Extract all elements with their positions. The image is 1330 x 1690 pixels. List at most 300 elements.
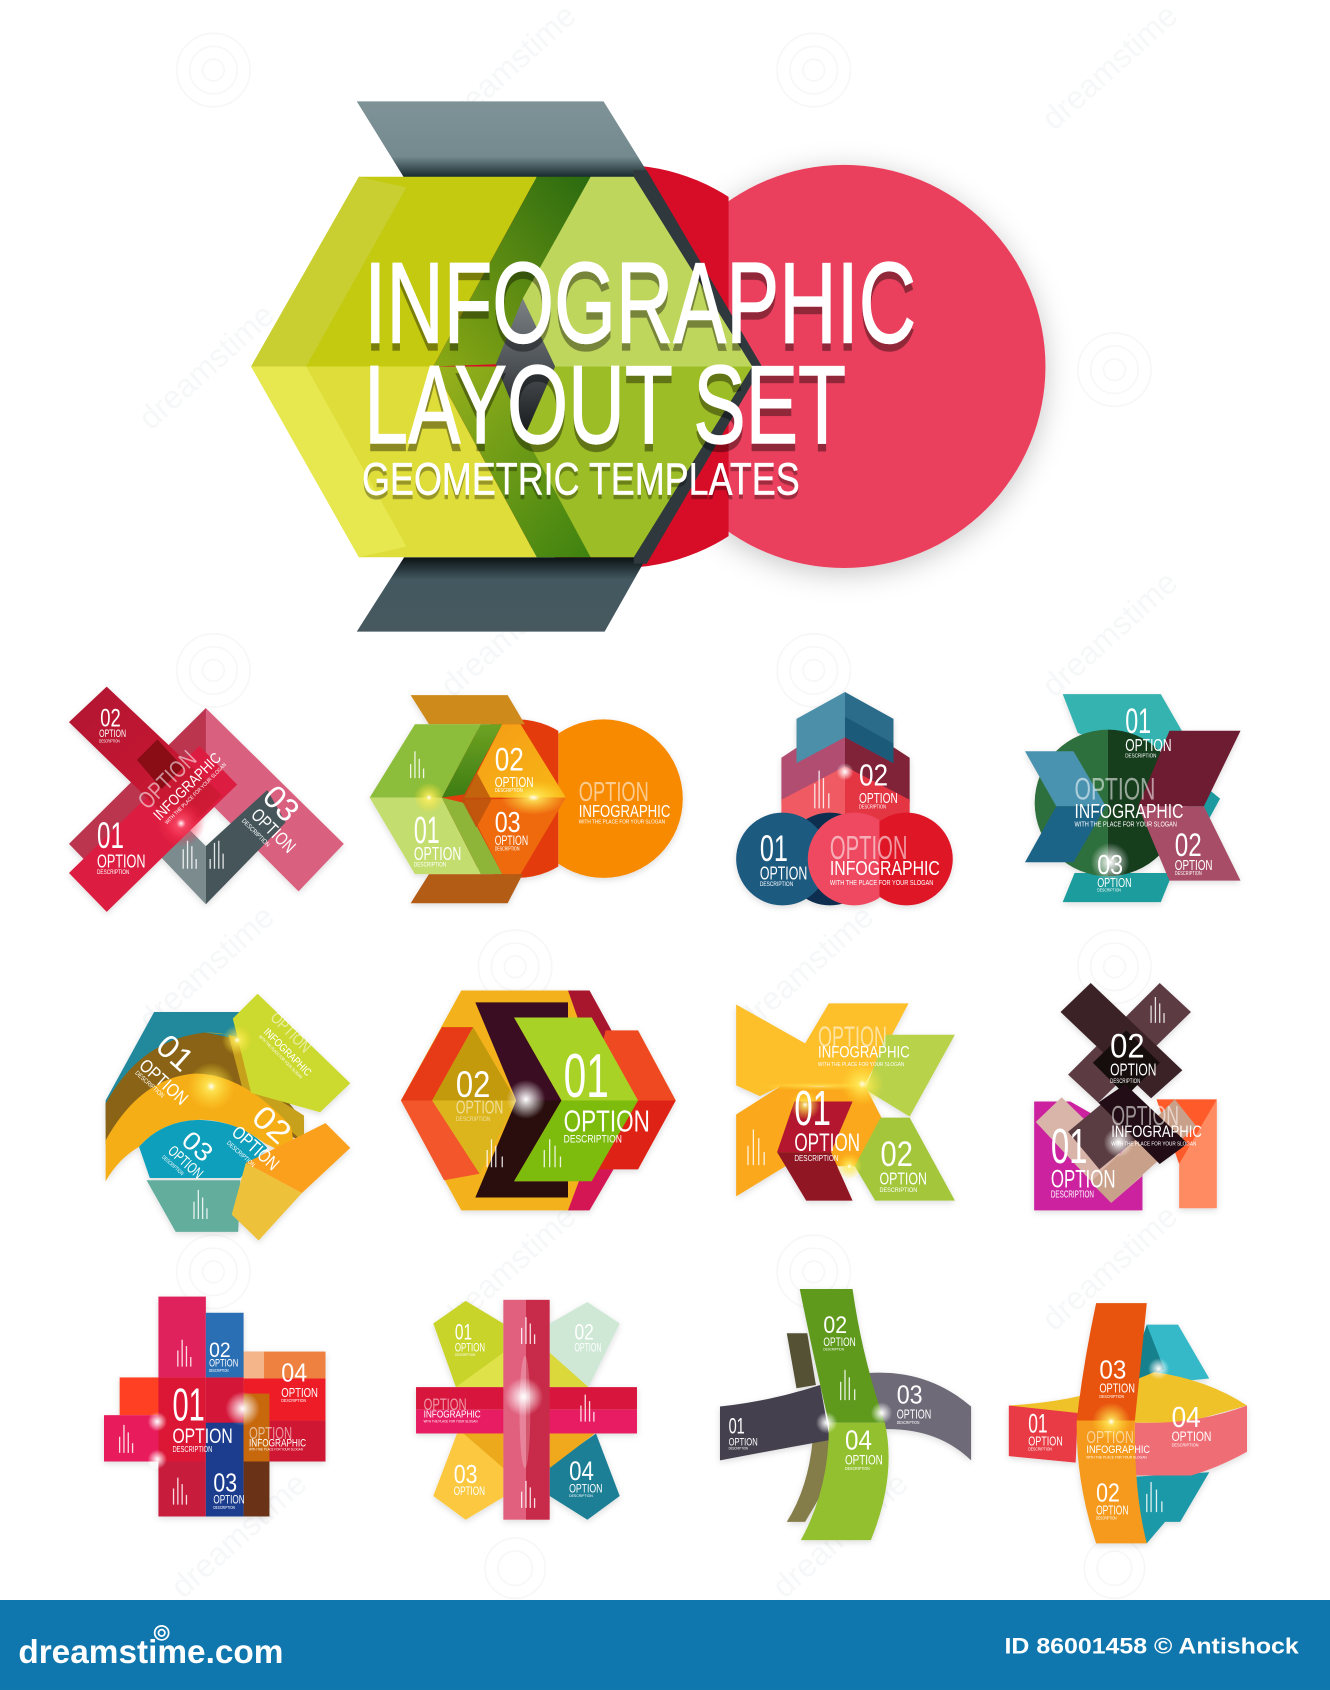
labels: 02 (859, 760, 888, 793)
labels: OPTION (579, 776, 649, 807)
glow (504, 1377, 543, 1416)
labels (729, 1313, 931, 1471)
labels: DESCRIPTION (564, 1133, 622, 1145)
glow (507, 1080, 545, 1119)
band bottom (442, 798, 502, 874)
watermark pattern: dreamstime (731, 898, 880, 1038)
labels: DESCRIPTION (133, 1070, 166, 1100)
green bottom (525, 366, 752, 557)
glow (519, 1356, 530, 1468)
labels (1075, 701, 1213, 892)
blue bottom (1025, 806, 1106, 862)
glow (1104, 1127, 1134, 1158)
watermark pattern: dreamstime (131, 297, 281, 436)
labels: 02 (245, 1098, 298, 1151)
labels: 02 (100, 705, 121, 732)
layout 2: orange circle (370, 695, 683, 903)
layout 6: hexagon chevrons (401, 991, 676, 1210)
watermark pattern: dreamstime (433, 1198, 583, 1337)
labels: OPTION (1172, 1428, 1211, 1444)
labels: OPTION (495, 832, 528, 848)
labels (760, 760, 940, 888)
labels: 02 (1175, 827, 1202, 863)
centre bottom right (550, 1433, 595, 1468)
title: LAYOUT SET (364, 343, 846, 467)
green ribbon top (800, 1289, 885, 1423)
labels: INFOGRAPHIC (818, 1043, 910, 1061)
labels: INFOGRAPHIC (150, 750, 225, 824)
labels: 01 (149, 1027, 201, 1078)
coral lower right (1135, 1405, 1247, 1476)
layout 9: colour columns (104, 1297, 325, 1516)
green circle right (1108, 730, 1181, 876)
green top (370, 724, 481, 798)
green circle left (1035, 730, 1108, 876)
labels: DESCRIPTION (99, 739, 120, 744)
blue circle (736, 813, 829, 905)
labels: WITH THE PLACE FOR YOUR SLOGAN (249, 1448, 303, 1452)
bars (544, 1139, 560, 1167)
pink left block (104, 1415, 159, 1461)
top left band (1061, 983, 1182, 1098)
labels: DESCRIPTION (495, 788, 523, 794)
horizontal upper (416, 1387, 637, 1410)
labels: OPTION (135, 1054, 193, 1109)
labels: 03 (495, 807, 521, 839)
labels: DESCRIPTION (1097, 887, 1121, 892)
hexagon outer lighter bottom (251, 366, 406, 557)
brown arc (106, 1033, 304, 1145)
bottom grey band (357, 557, 647, 632)
orange left block (120, 1377, 160, 1415)
band top (442, 724, 502, 798)
labels: DESCRIPTION (1172, 1442, 1199, 1447)
bottom hexagon (147, 1180, 240, 1232)
labels (456, 1041, 650, 1145)
centre top right (550, 1353, 588, 1387)
labels: DESCRIPTION (160, 1155, 184, 1177)
yellow panel (232, 1163, 302, 1241)
layout 7: yellow and green arrows (736, 1003, 955, 1201)
bars (411, 751, 424, 778)
labels (794, 1022, 927, 1194)
orange block bottom (1179, 1099, 1217, 1208)
red horizontal upper (244, 1379, 325, 1421)
red column centre (158, 1377, 206, 1461)
labels: INFOGRAPHIC (579, 801, 670, 821)
dark grey ribbon (720, 1385, 830, 1460)
left red band bottom (401, 1100, 480, 1180)
dark square (137, 739, 183, 789)
yellow green panel (233, 994, 350, 1112)
blue column middle (206, 1377, 244, 1444)
labels (1051, 1027, 1202, 1200)
lower red band (69, 746, 237, 912)
labels: 01 (1125, 701, 1151, 741)
layout 11: green ribbon (720, 1289, 971, 1540)
labels: OPTION (456, 1096, 503, 1117)
red circle (434, 166, 729, 567)
centre top left (456, 1353, 503, 1387)
bars (581, 1395, 594, 1422)
labels (1028, 1357, 1211, 1521)
glow (222, 1025, 252, 1055)
labels: OPTION (569, 1482, 602, 1496)
dark red chevron bottom (777, 1152, 853, 1201)
labels: 01 (97, 815, 124, 856)
labels: DESCRIPTION (455, 1353, 476, 1357)
labels: 01 (172, 1379, 205, 1431)
labels: OPTION (213, 1493, 245, 1507)
watermark pattern (131, 0, 1184, 1605)
light orange strip (244, 1352, 264, 1379)
labels: OPTION (760, 862, 807, 883)
gold diamond top (432, 1027, 516, 1100)
blue top (1025, 751, 1106, 806)
top band (411, 695, 525, 724)
dark red chevron top (777, 1102, 853, 1152)
labels: 03 (454, 1461, 477, 1489)
glow (148, 1450, 167, 1469)
labels: DESCRIPTION (1028, 1447, 1052, 1452)
labels: OPTION (879, 1169, 927, 1189)
labels: WITH THE PLACE FOR YOUR SLOGAN (579, 819, 665, 825)
centre diamond (496, 299, 555, 435)
labels: INFOGRAPHIC (1086, 1444, 1150, 1456)
layout 10: cross and petals (416, 1300, 637, 1520)
labels: 02 (1110, 1027, 1145, 1065)
orange strip (244, 1352, 325, 1379)
title: GEOMETRIC TEMPLATES (362, 454, 800, 505)
bottom band (411, 874, 523, 903)
glow (754, 1082, 884, 1091)
glow (790, 1090, 820, 1120)
green top (865, 1035, 955, 1117)
title (362, 240, 916, 505)
teal top shape (1142, 1325, 1209, 1385)
layout 4: teal and green (1025, 694, 1241, 902)
labels: DESCRIPTION (569, 1494, 593, 1498)
watermark pattern: dreamstime (131, 898, 281, 1038)
labels: 01 (564, 1041, 609, 1111)
lower red chevron (781, 766, 845, 835)
teal back shape (106, 1012, 259, 1121)
top chevron dark fold (845, 717, 893, 763)
brown arc right (205, 1033, 304, 1142)
petal top left (433, 1301, 503, 1387)
labels: 04 (569, 1456, 594, 1486)
dark chevron bottom (475, 1100, 568, 1197)
top chevron left (796, 692, 845, 763)
labels: 02 (823, 1313, 847, 1339)
watermark pattern: dreamstime (1035, 1198, 1184, 1337)
labels: OPTION (729, 1436, 758, 1448)
labels: WITH THE PLACE FOR YOUR SLOGAN (1075, 822, 1177, 829)
labels: 03 (176, 1126, 218, 1168)
brown column bottom (244, 1461, 269, 1516)
petal bottom left (433, 1433, 503, 1520)
labels (424, 1320, 602, 1498)
orange circle (558, 719, 685, 882)
labels: WITH THE PLACE FOR YOUR SLOGAN (258, 1034, 303, 1079)
labels: DESCRIPTION (240, 818, 271, 849)
labels: INFOGRAPHIC (1111, 1123, 1202, 1141)
bars (522, 1481, 535, 1508)
labels: OPTION (247, 804, 300, 857)
plum chevron right (845, 716, 910, 803)
labels: OPTION (134, 746, 202, 815)
pink circle (808, 813, 879, 905)
red left (1009, 1405, 1078, 1463)
right red top (587, 1030, 676, 1100)
grey ribbon (868, 1373, 971, 1460)
bars (748, 1130, 764, 1165)
labels: 04 (281, 1360, 307, 1388)
orange middle (736, 1086, 889, 1196)
green chevron top (514, 1017, 638, 1100)
watermark pattern: dreamstime (164, 1465, 313, 1605)
vertical left (503, 1300, 526, 1520)
crimson top (568, 991, 620, 1045)
labels: DESCRIPTION (1175, 871, 1202, 877)
labels: DESCRIPTION (729, 1447, 748, 1451)
labels: 02 (495, 742, 524, 778)
labels: OPTION (454, 1484, 485, 1498)
teal arc (139, 1120, 267, 1178)
orange panel (246, 1123, 350, 1193)
labels: WITH THE PLACE FOR YOUR SLOGAN (818, 1062, 904, 1068)
bars (1147, 1482, 1162, 1512)
plum top (1138, 731, 1241, 806)
labels: DESCRIPTION (879, 1187, 917, 1194)
hexagon left bottom (251, 366, 537, 557)
hexagon outer lighter top (251, 177, 406, 366)
labels: OPTION (164, 1143, 206, 1183)
labels: OPTION (249, 1423, 292, 1443)
hero infographic (251, 101, 1045, 632)
bars (174, 1478, 186, 1505)
horizontal lower (416, 1410, 637, 1433)
centre black diamond (1093, 1030, 1160, 1096)
bottom teal band (1063, 873, 1173, 902)
labels: DESCRIPTION (209, 1368, 228, 1373)
labels: OPTION (1028, 1433, 1063, 1448)
labels: INFOGRAPHIC (261, 1026, 314, 1079)
red circle (438, 720, 560, 882)
top teal band (1063, 694, 1186, 760)
labels: OPTION (424, 1396, 467, 1414)
labels: DESCRIPTION (97, 869, 130, 876)
labels: OPTION (823, 1335, 856, 1349)
blue column top (206, 1313, 244, 1377)
labels: OPTION (209, 1358, 238, 1370)
labels: INFOGRAPHIC (1075, 800, 1183, 823)
lower left diamond (1068, 1084, 1159, 1169)
bars (487, 1139, 502, 1167)
labels: OPTION (99, 728, 126, 740)
left pink band (69, 708, 206, 884)
tan band right (1091, 1099, 1196, 1203)
layout 3: circles and chevrons (736, 692, 953, 905)
labels (172, 1337, 318, 1510)
labels: DESCRIPTION (823, 1347, 844, 1351)
glow (1148, 1358, 1169, 1380)
orange block top (1156, 1099, 1217, 1164)
magenta block (1034, 1102, 1142, 1210)
labels: OPTION (859, 790, 898, 807)
glow (836, 1153, 862, 1179)
green bottom (370, 798, 481, 874)
labels: DESCRIPTION (760, 881, 794, 888)
labels: OPTION (830, 830, 908, 867)
labels: WITH THE PLACE FOR YOUR SLOGAN (424, 1420, 478, 1424)
orange ribbon bottom (1077, 1421, 1147, 1543)
red column bottom (158, 1461, 206, 1516)
labels: OPTION (1096, 1502, 1128, 1517)
layout 12: orange ribbon and dome (1009, 1303, 1247, 1543)
layout 1: red cross (69, 687, 344, 912)
labels: DESCRIPTION (172, 1444, 212, 1454)
labels: OPTION (564, 1106, 650, 1139)
labels: 01 (1051, 1118, 1087, 1174)
green bottom (855, 1118, 955, 1201)
labels: 01 (414, 809, 440, 851)
labels: 01 (794, 1080, 831, 1136)
labels: 04 (1172, 1402, 1201, 1434)
orange top (465, 724, 566, 798)
glow (1091, 843, 1130, 882)
labels: INFOGRAPHIC (249, 1437, 306, 1449)
labels: DESCRIPTION (1099, 1394, 1124, 1399)
green band top (433, 177, 591, 366)
labels: 01 (1028, 1408, 1048, 1438)
small diamond (461, 772, 491, 828)
bars (194, 1190, 207, 1219)
watermark pattern: dreamstime (433, 564, 583, 704)
labels: 02 (1096, 1479, 1120, 1507)
labels: WITH THE PLACE FOR YOUR SLOGAN (164, 762, 228, 826)
gold arc (106, 1073, 296, 1181)
labels: OPTION (1175, 857, 1213, 874)
top chevron right (845, 692, 893, 763)
labels: OPTION (897, 1406, 931, 1421)
olive upper ribbon (787, 1333, 816, 1388)
left red band top (401, 1027, 473, 1100)
grey chevron right (206, 790, 286, 904)
green ribbon bottom (801, 1423, 889, 1540)
gold diamond bottom (432, 1100, 516, 1174)
top right band (1068, 983, 1191, 1103)
hexagon dark edge (634, 170, 762, 564)
labels: DESCRIPTION (225, 1140, 256, 1169)
glow (1092, 1402, 1131, 1441)
labels: DESCRIPTION (1096, 1516, 1117, 1521)
labels (133, 1009, 314, 1183)
glow (836, 763, 854, 780)
labels: DESCRIPTION (1110, 1078, 1141, 1085)
watermark pattern: dreamstime (1035, 564, 1184, 704)
labels: 02 (456, 1064, 490, 1105)
brown column top (244, 1394, 269, 1461)
labels: DESCRIPTION (213, 1505, 235, 1510)
bars (178, 1340, 191, 1367)
green band bottom (433, 366, 591, 557)
bars (120, 1425, 133, 1453)
labels: OPTION (267, 1009, 314, 1056)
olive lower ribbon (787, 1440, 830, 1522)
labels (414, 742, 670, 869)
small teal shape (1186, 785, 1220, 822)
labels: DESCRIPTION (1125, 754, 1156, 760)
grey chevron left (162, 823, 206, 904)
labels: DESCRIPTION (1051, 1189, 1094, 1200)
labels: OPTION (818, 1022, 887, 1054)
yellow hexagon (401, 991, 582, 1210)
labels: OPTION (1051, 1167, 1116, 1194)
labels: 01 (455, 1320, 472, 1345)
red circle (860, 813, 953, 905)
labels: INFOGRAPHIC (830, 857, 940, 880)
lower red chevron right (845, 766, 910, 835)
logo text: dreamstime.com (18, 1634, 283, 1671)
labels: OPTION (574, 1341, 601, 1355)
navy circle (784, 813, 876, 905)
labels: 03 (897, 1381, 923, 1409)
image id and credit: ID 86001458 © Antishock (1005, 1633, 1299, 1658)
tan band left (1036, 1097, 1142, 1203)
teal bottom shape (1135, 1472, 1209, 1543)
labels: OPTION (455, 1341, 485, 1355)
labels: OPTION (794, 1130, 860, 1157)
pink right band (162, 708, 344, 891)
yellow top (736, 1003, 909, 1096)
blue column bottom (206, 1423, 244, 1516)
pink circle (642, 165, 1045, 568)
centre bottom left (463, 1433, 503, 1468)
labels: OPTION (1097, 875, 1132, 890)
labels: 02 (574, 1320, 594, 1345)
labels: OPTION (97, 851, 146, 872)
labels: 03 (1099, 1357, 1126, 1385)
plum chevron left (781, 716, 845, 803)
light green top (523, 177, 752, 366)
labels: DESCRIPTION (495, 846, 520, 852)
labels: 02 (881, 1134, 913, 1174)
glow (871, 1402, 892, 1424)
lower dark band (1098, 1084, 1188, 1164)
labels: 04 (845, 1425, 872, 1456)
hexagon left top (251, 177, 537, 366)
glow (225, 1391, 260, 1426)
dark chevron top (475, 1002, 568, 1100)
labels: 03 (213, 1470, 237, 1498)
labels: DESCRIPTION (456, 1116, 491, 1123)
glow (148, 1412, 167, 1431)
vertical right (526, 1300, 550, 1520)
bars (841, 1370, 855, 1400)
glow (816, 1412, 837, 1433)
yellow dome (1009, 1372, 1247, 1423)
labels: OPTION (495, 774, 534, 791)
right red bottom (587, 1100, 676, 1169)
logo spiral (155, 1626, 169, 1640)
labels: 02 (209, 1337, 231, 1362)
labels: 01 (760, 828, 788, 869)
labels: OPTION (281, 1385, 318, 1400)
labels: 03 (256, 778, 306, 829)
labels: DESCRIPTION (897, 1420, 919, 1425)
labels: OPTION (1086, 1427, 1134, 1447)
